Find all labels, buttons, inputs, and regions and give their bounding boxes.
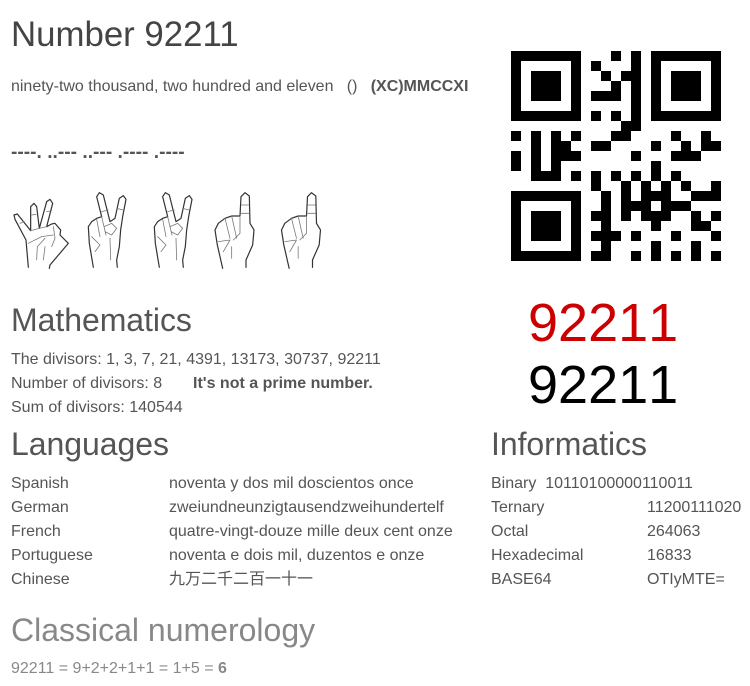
informatics table: BASE64	[491, 571, 551, 588]
languages table: French	[11, 523, 61, 540]
hand sign 2	[154, 193, 192, 267]
number of divisors and primality: Number of divisors: 8	[11, 375, 162, 392]
sum of divisors: Sum of divisors: 140544	[11, 399, 183, 416]
title: Number 92211	[11, 15, 239, 54]
informatics table: OTIyMTE=	[647, 571, 725, 588]
informatics table	[491, 475, 741, 588]
languages table	[11, 475, 453, 588]
languages table: noventa e dois mil, duzentos e onze	[169, 547, 424, 564]
numerology calculation: 92211 = 9+2+2+1+1 = 1+5 = 6	[11, 660, 227, 677]
languages table: zweiundneunzigtausendzweihundertelf	[169, 499, 444, 516]
languages table: 九万二千二百一十一	[169, 571, 313, 588]
divisors list: The divisors: 1, 3, 7, 21, 4391, 13173, 30737, 92211	[11, 351, 381, 368]
heading: Mathematics: Mathematics	[11, 302, 192, 338]
hand sign 9	[14, 199, 68, 268]
informatics table: 11200111020	[647, 499, 741, 516]
icon: QR code	[511, 51, 721, 261]
heading: Informatics: Informatics	[491, 426, 647, 462]
languages table: quatre-vingt-douze mille deux cent onze	[169, 523, 453, 540]
heading: Classical numerology: Classical numerology	[11, 612, 315, 648]
languages table: noventa y dos mil doscientos once	[169, 475, 414, 492]
number in words and Roman numeral: ninety-two thousand, two hundred and eleven () (XC)MMCCXI	[11, 78, 468, 95]
hand sign 1	[281, 193, 320, 268]
hand sign 2	[88, 193, 126, 267]
number of divisors and primality: It's not a prime number.	[193, 375, 373, 392]
icon: sign language hands	[13, 192, 322, 269]
languages table: Chinese	[11, 571, 70, 588]
informatics table: Hexadecimal	[491, 547, 583, 564]
informatics table: 264063	[647, 523, 700, 540]
large number in red: 92211	[528, 293, 678, 353]
languages table: Portuguese	[11, 547, 93, 564]
informatics table: Ternary	[491, 499, 544, 516]
hand sign 1	[215, 193, 254, 268]
Morse code: ----. ..--- ..--- .---- .----	[11, 142, 185, 163]
informatics table: Binary 10110100000110011	[491, 475, 693, 492]
large number in black: 92211	[528, 355, 678, 415]
languages table: German	[11, 499, 69, 516]
heading: Languages: Languages	[11, 426, 169, 462]
number of divisors and primality	[11, 375, 373, 392]
informatics table: Octal	[491, 523, 528, 540]
informatics table: 16833	[647, 547, 692, 564]
languages table: Spanish	[11, 475, 69, 492]
